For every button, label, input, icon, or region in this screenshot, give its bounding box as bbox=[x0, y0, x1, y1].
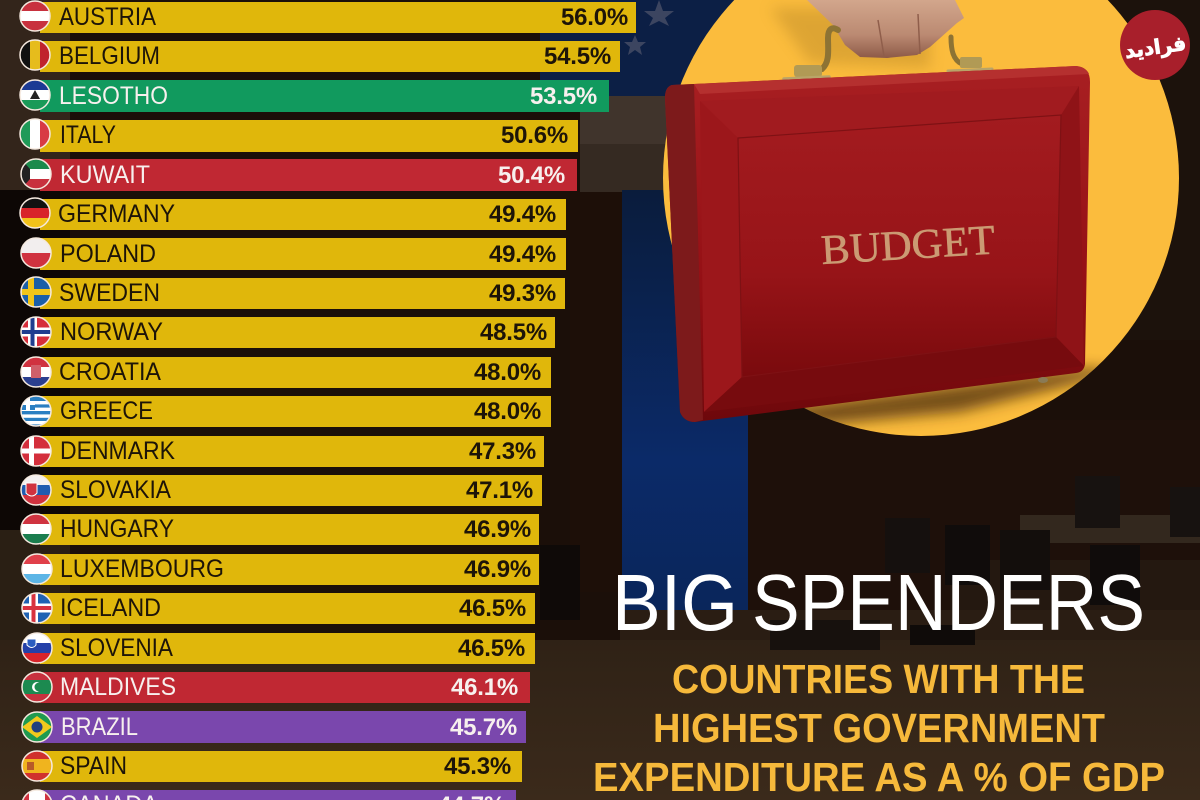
row: Poland: 49.4% bbox=[489, 241, 556, 268]
row: Croatia: 48.0% bbox=[474, 359, 541, 386]
row: Lesotho: 53.5% bbox=[530, 83, 597, 110]
title: BIG bbox=[612, 558, 738, 647]
row: Austria: 56.0% bbox=[561, 4, 628, 31]
subtitle: HIGHEST GOVERNMENT bbox=[653, 705, 1105, 751]
row: Brazil: 45.7% bbox=[450, 714, 517, 741]
row: Maldives: MALDIVES bbox=[60, 673, 176, 701]
row: Greece bbox=[21, 396, 551, 427]
row: Lesotho: LESOTHO bbox=[59, 82, 168, 110]
row: Slovakia: SLOVAKIA bbox=[60, 476, 171, 504]
title: SPENDERS bbox=[752, 558, 1145, 647]
row: Iceland: ICELAND bbox=[60, 594, 161, 622]
row: Austria bbox=[20, 1, 636, 33]
row: Brazil bbox=[22, 711, 526, 743]
row: Slovakia bbox=[21, 475, 542, 506]
briefcase foot bbox=[1038, 377, 1048, 383]
row: Denmark bbox=[21, 436, 544, 467]
row: Sweden: SWEDEN bbox=[59, 279, 160, 307]
row: Lesotho bbox=[20, 80, 609, 112]
row: Kuwait bbox=[21, 159, 577, 191]
row: Iceland: 46.5% bbox=[459, 595, 526, 622]
row: Croatia: CROATIA bbox=[59, 358, 161, 386]
logo: Faradid badge: فرادید bbox=[1123, 31, 1188, 63]
row: Italy bbox=[20, 119, 578, 152]
row: Hungary: HUNGARY bbox=[60, 515, 174, 543]
icon: briefcase bbox=[665, 28, 1090, 422]
row: Croatia bbox=[21, 357, 551, 388]
row: Belgium: 54.5% bbox=[544, 43, 611, 70]
row: Hungary bbox=[21, 514, 539, 545]
row: Norway: NORWAY bbox=[60, 318, 163, 346]
EU flag stars bbox=[624, 0, 674, 55]
row: Norway bbox=[21, 317, 555, 348]
row: Poland bbox=[21, 238, 566, 270]
row: Luxembourg: LUXEMBOURG bbox=[60, 555, 224, 583]
row: Greece: GREECE bbox=[60, 397, 153, 425]
row: Germany: 49.4% bbox=[489, 201, 556, 228]
row: Germany bbox=[20, 198, 566, 230]
row: Kuwait: 50.4% bbox=[498, 162, 565, 189]
title bbox=[612, 558, 1145, 647]
row: Italy: ITALY bbox=[60, 121, 116, 149]
row: Hungary: 46.9% bbox=[464, 516, 531, 543]
row: Luxembourg: 46.9% bbox=[464, 556, 531, 583]
row: Austria: AUSTRIA bbox=[59, 3, 156, 31]
row: Italy: 50.6% bbox=[501, 122, 568, 149]
row: Slovenia: 46.5% bbox=[458, 635, 525, 662]
row: Maldives: 46.1% bbox=[451, 674, 518, 701]
row: Canada bbox=[22, 790, 516, 800]
row: Belgium bbox=[20, 40, 620, 72]
row: Slovenia: SLOVENIA bbox=[60, 634, 173, 662]
row: Greece: 48.0% bbox=[474, 398, 541, 425]
row: Iceland bbox=[22, 593, 535, 624]
yellow circle bbox=[663, 0, 1179, 436]
row: Norway: 48.5% bbox=[480, 319, 547, 346]
briefcase handle bbox=[784, 28, 992, 79]
row: Spain: 45.3% bbox=[444, 753, 511, 780]
subtitle: COUNTRIES WITH THE bbox=[672, 656, 1085, 702]
case shadow on circle bbox=[690, 8, 1120, 424]
briefcase label: BUDGET bbox=[820, 217, 996, 274]
row: Denmark: DENMARK bbox=[60, 437, 175, 465]
subtitle bbox=[593, 656, 1165, 800]
briefcase front panel bbox=[738, 115, 1061, 377]
row: Slovakia: 47.1% bbox=[466, 477, 533, 504]
row: Sweden: 49.3% bbox=[489, 280, 556, 307]
bar chart: government expenditure bbox=[20, 1, 636, 800]
row: Belgium: BELGIUM bbox=[59, 42, 160, 70]
row: Spain: SPAIN bbox=[60, 752, 127, 780]
row: Spain bbox=[22, 751, 522, 782]
row: Luxembourg bbox=[22, 554, 539, 585]
row: Kuwait: KUWAIT bbox=[60, 161, 150, 189]
briefcase body bbox=[665, 66, 1090, 422]
briefcase bevel bbox=[700, 86, 1079, 138]
icon: hand holding briefcase bbox=[807, 0, 964, 58]
row: Poland: POLAND bbox=[60, 240, 156, 268]
row: Sweden bbox=[21, 277, 565, 309]
subtitle: EXPENDITURE AS A % OF GDP bbox=[593, 754, 1165, 800]
row: Denmark: 47.3% bbox=[469, 438, 536, 465]
row: Slovenia bbox=[22, 633, 535, 664]
row: Germany: GERMANY bbox=[58, 200, 175, 228]
logo: Faradid badge bbox=[1120, 10, 1190, 80]
row: Maldives bbox=[22, 672, 530, 703]
row: Brazil: BRAZIL bbox=[61, 713, 138, 741]
